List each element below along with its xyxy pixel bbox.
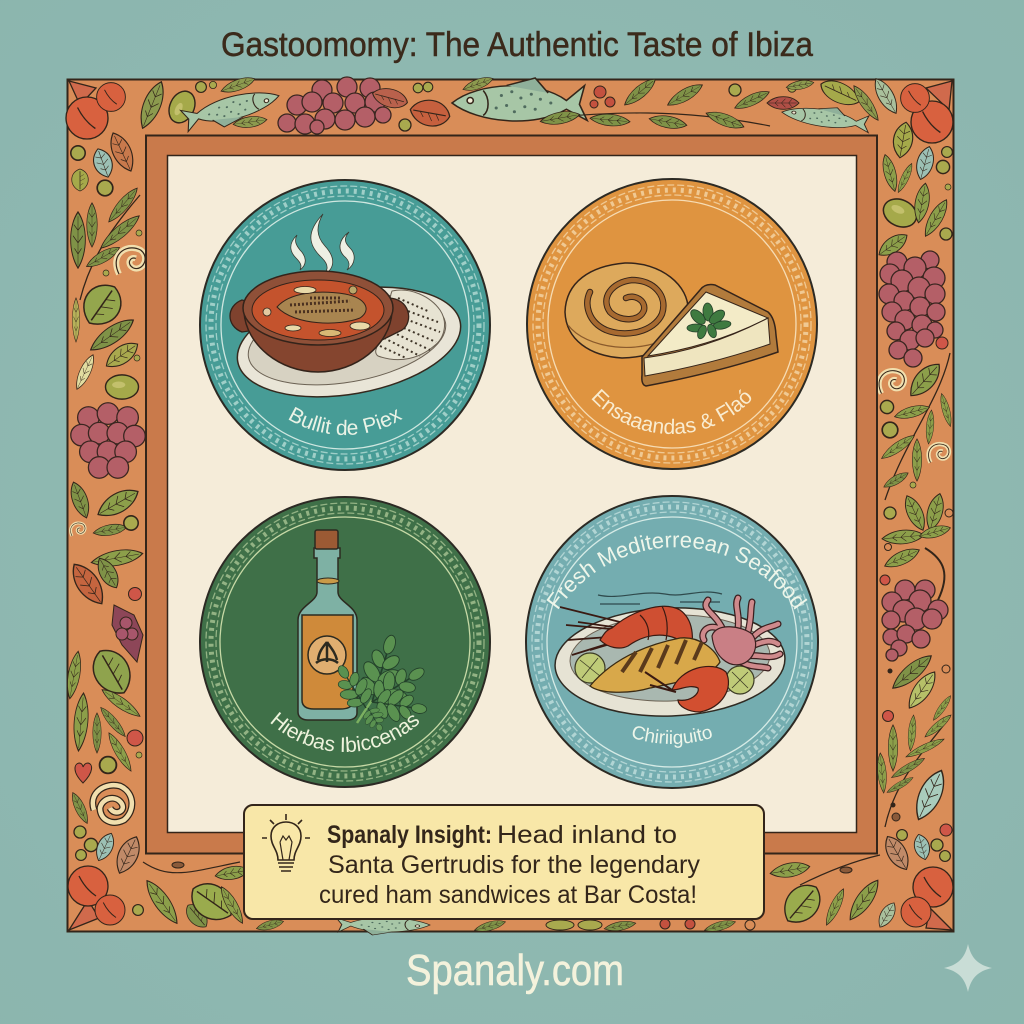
insight text: cured ham sandwices at Bar Costa! bbox=[319, 881, 697, 909]
panel: Hierbas Ibicencas bbox=[199, 496, 491, 788]
corner fruits bbox=[66, 81, 953, 930]
label bbox=[235, 642, 455, 752]
panel: Fresh Mediterranean Seafood: Chiriiguito bbox=[632, 726, 712, 748]
icon: spiral pastry bbox=[565, 263, 688, 358]
panel: Ensaimadas and Flao: Ensaaandas & Flaó bbox=[592, 388, 752, 434]
insight text: Santa Gertrudis for the legendary bbox=[328, 851, 701, 879]
panel: inner band and cream field bbox=[146, 136, 877, 854]
icon: plate with rice bbox=[229, 271, 469, 413]
panel: Ensaimadas and Flao bbox=[526, 178, 818, 470]
panel: Fresh Mediterranean Seafood: Fresh Mediterreean Seafood bbox=[546, 535, 808, 610]
title: Gastoomomy: The Authentic Taste of Ibiza bbox=[221, 26, 813, 64]
panel: Hierbas Ibicencas: Hierbas Ibiccenas bbox=[270, 712, 419, 752]
insight text: Head inland to bbox=[497, 821, 677, 849]
icon: flao cheesecake slice bbox=[642, 285, 778, 386]
icon: herb garnish bbox=[687, 303, 732, 340]
icon: steam bbox=[291, 214, 354, 277]
icon: lime slices bbox=[575, 653, 754, 694]
icon: light bulb bbox=[262, 814, 310, 871]
icon: squid bbox=[703, 598, 780, 668]
panel: Fresh Mediterranean Seafood bbox=[525, 495, 819, 789]
icon: spiral bbox=[93, 785, 132, 822]
icon: sparkle bbox=[944, 944, 992, 992]
icon: water lines bbox=[598, 592, 722, 604]
footer: website: Spanaly.com bbox=[406, 946, 624, 995]
label: top arc bbox=[545, 547, 808, 634]
icon: curled prawn bbox=[645, 666, 728, 712]
grape cluster bbox=[882, 580, 948, 661]
icon: large prawn bbox=[560, 606, 692, 655]
panel: Bullit de Piex bbox=[199, 179, 491, 471]
label: bottom arc bbox=[612, 730, 732, 744]
insight text: Spanaly Insight: bbox=[327, 821, 492, 849]
icon: grilled fish fillet bbox=[590, 638, 720, 692]
border band: top decorations bbox=[135, 74, 902, 137]
icon: heart bbox=[75, 763, 92, 783]
border band: right decorations bbox=[875, 121, 954, 874]
callout: Spanaly Insight bbox=[244, 805, 764, 919]
label bbox=[235, 325, 455, 435]
icon: seafood plate bbox=[553, 598, 787, 720]
panel: floral border frame bbox=[64, 74, 954, 935]
label bbox=[562, 324, 782, 434]
panel: Bullit de Piex: Bullit de Piex bbox=[288, 406, 402, 436]
icon: clay bowl of stew bbox=[230, 271, 409, 372]
icon: herb sprig bbox=[325, 629, 434, 736]
grape cluster bbox=[879, 251, 945, 367]
icon: liqueur bottle bbox=[298, 530, 357, 720]
border band: left decorations bbox=[64, 129, 145, 877]
border band: bottom decorations bbox=[133, 855, 899, 935]
grape cluster bbox=[278, 77, 391, 134]
